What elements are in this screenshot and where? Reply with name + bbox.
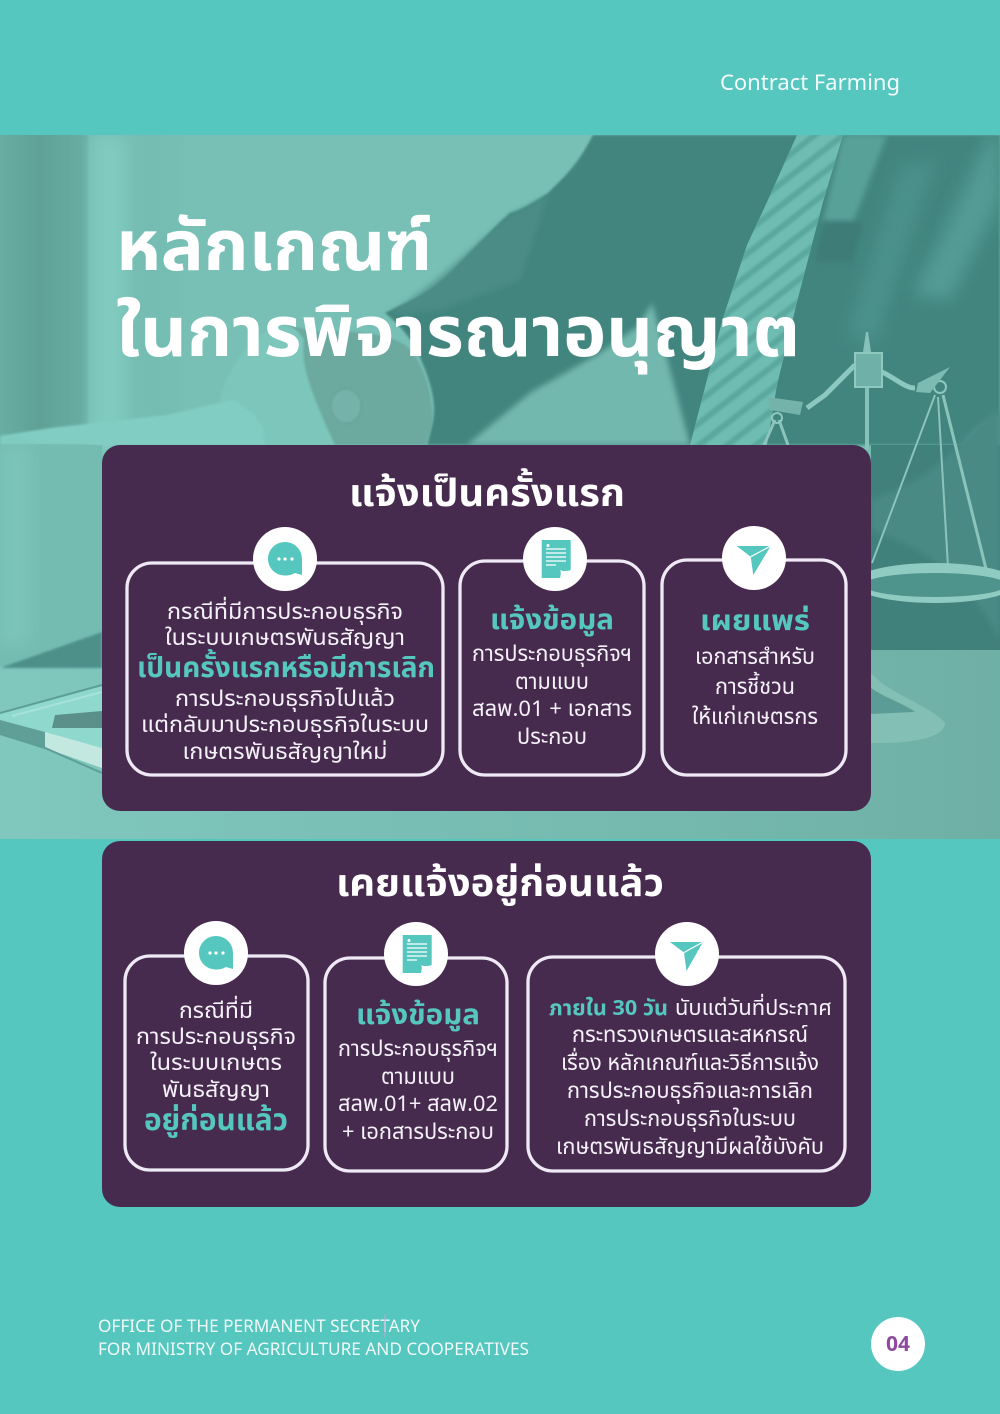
hero photo: handshake and scales [0,100,1000,839]
card: existing case: การประกอบธุรกิจ [136,1021,296,1051]
card: existing case: กรณีที่มี [179,995,253,1025]
card: within 30 days: เรื่อง หลักเกณฑ์และวิธีการแจ้ง [561,1047,819,1077]
footer text: FOR MINISTRY OF AGRICULTURE AND COOPERATIVES [98,1337,529,1360]
panel: previously notified [102,841,871,1207]
card: notify information: สลพ.01 + เอกสาร [472,693,632,723]
card: publish: เผยแพร่ [700,601,810,639]
left background [0,445,102,466]
tie [690,135,843,445]
card: existing case: อยู่ก่อนแล้ว [144,1098,288,1139]
card: within 30 days: การประกอบธุรกิจและการเลิก [567,1075,813,1105]
card: within 30 days: การประกอบธุรกิจในระบบ [584,1103,796,1133]
card: first-time case: เกษตรพันธสัญญาใหม่ [182,736,388,766]
heading: first-time: แจ้งเป็นครั้งแรก [349,466,625,518]
page number [871,1317,925,1371]
card: notify information forms [325,958,507,1171]
card: first-time case: ในระบบเกษตรพันธสัญญา [165,622,405,652]
heading: previously notified: เคยแจ้งอยู่ก่อนแล้ว [336,856,664,908]
card: notify information forms: การประกอบธุรกิจฯ [338,1033,498,1063]
right background [871,445,1000,650]
icon: paper plane [655,922,719,986]
title [116,195,800,377]
icon: document [523,527,587,591]
card: publish: เอกสารสำหรับ [695,641,815,671]
card: notify information forms: สลพ.01+ สลพ.02 [338,1088,498,1118]
card: notify information: แจ้งข้อมูล [490,600,614,638]
title: หลักเกณฑ์ [116,195,432,291]
card: notify information forms: + เอกสารประกอบ [342,1116,494,1146]
table surface [0,650,1000,839]
card: existing case: ในระบบเกษตร [150,1047,282,1077]
card: within 30 days: เกษตรพันธสัญญามีผลใช้บังคับ [556,1131,824,1161]
card: notify information: การประกอบธุรกิจฯ [472,638,632,668]
card: publish: การชี้ชวน [715,671,795,701]
icon: chat bubble [253,527,317,591]
card: notify information: ประกอบ [517,721,587,751]
card: publish [662,560,846,775]
card: notify information forms: ตามแบบ [381,1061,455,1091]
card: publish: ให้แก่เกษตรกร [692,701,818,731]
card: existing case: พันธสัญญา [162,1074,270,1104]
scales [764,332,1000,743]
card: first-time case [127,563,443,775]
clipboard [0,685,102,773]
card: notify information forms: แจ้งข้อมูล [356,995,480,1033]
icon: paper plane [722,526,786,590]
panel: first-time notification [102,445,871,811]
hand and forearm [0,326,433,445]
card: existing case [125,956,308,1170]
card: within 30 days: กระทรวงเกษตรและสหกรณ์ [572,1019,808,1049]
card: first-time case: แต่กลับมาประกอบธุรกิจในระบบ [141,709,429,739]
footer text [98,1314,529,1360]
card: first-time case: การประกอบธุรกิจไปแล้ว [175,683,395,713]
card: notify information [460,561,644,775]
card: within 30 days: นับแต่วันที่ประกาศ [675,993,832,1022]
icon: document [384,922,448,986]
footer text: OFFICE OF THE PERMANENT SECRETARY [98,1314,420,1337]
card: within 30 days: ภายใน 30 วัน [549,994,668,1022]
page number: 04 [886,1330,910,1358]
card: first-time case: กรณีที่มีการประกอบธุรกิจ [167,596,403,626]
card: first-time case: เป็นครั้งแรกหรือมีการเลิก [137,648,435,686]
header label: Contract Farming [720,67,900,97]
title: ในการพิจารณาอนุญาต [116,281,800,377]
card: within 30 days [528,957,845,1171]
card: notify information: ตามแบบ [515,666,589,696]
icon: chat bubble [184,921,248,985]
